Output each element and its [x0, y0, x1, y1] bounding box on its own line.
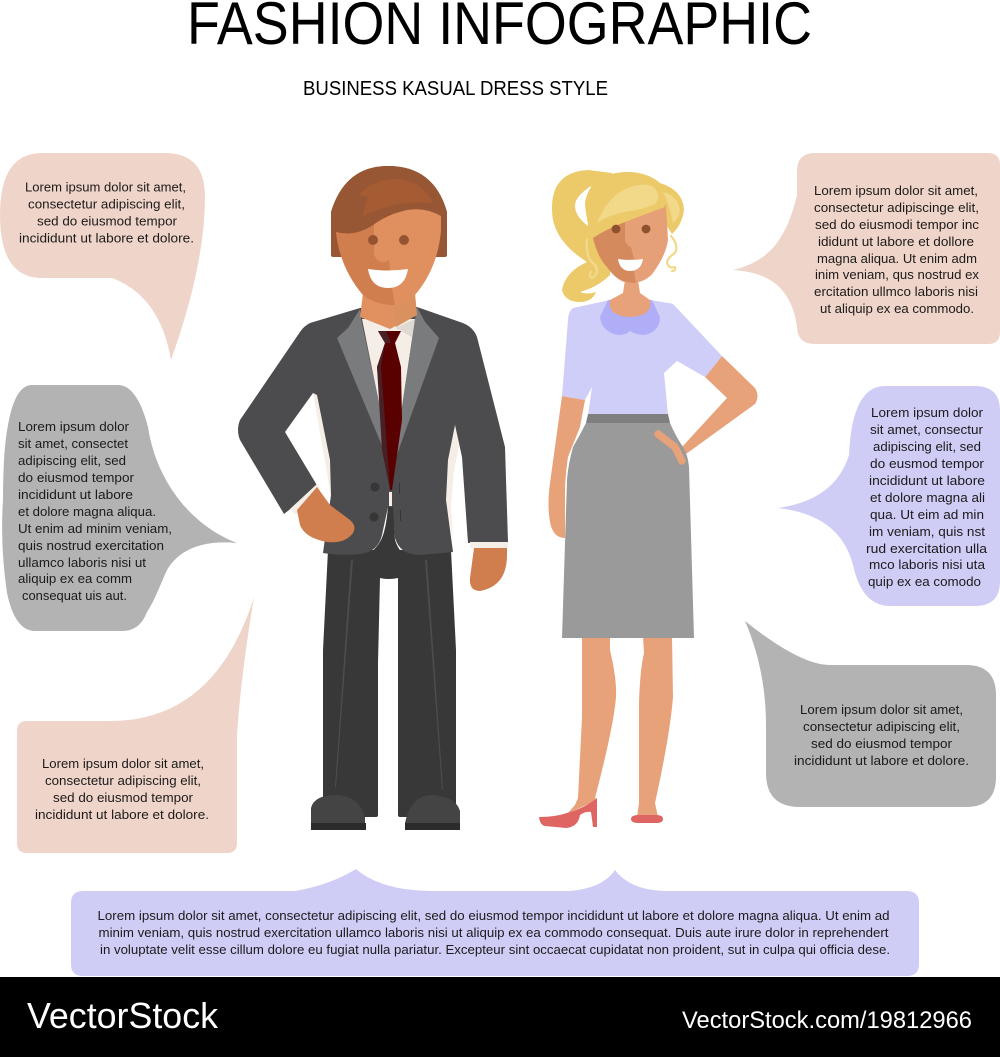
callout: bottom left: Lorem ipsum dolor sit amet,: [42, 756, 204, 771]
eyes: [368, 235, 409, 245]
callout: top right: consectetur adipiscinge elit,: [814, 200, 979, 215]
face shade: [593, 205, 636, 283]
callout: bottom left: [17, 597, 254, 853]
callout: top right: ut aliquip ex ea commodo.: [820, 301, 974, 316]
callout: middle left: Lorem ipsum dolor: [18, 419, 130, 434]
subtitle: BUSINESS KASUAL DRESS STYLE: [303, 78, 608, 100]
callout: top right: sed do eiusmodi tempor inc: [815, 217, 980, 232]
callout: middle right: rud exercitation ulla: [866, 541, 988, 556]
callout: top right: ercitation ullmco laboris nisi: [814, 284, 978, 299]
left cuff: [290, 484, 321, 515]
hand on hip: [658, 434, 682, 461]
figure: businessman: [238, 166, 508, 830]
callout: top left: consectetur adipiscing elit,: [28, 196, 185, 212]
callout: bottom right: incididunt ut labore et dolore.: [794, 753, 969, 768]
callout: top right: ididunt ut labore et dollore: [818, 234, 974, 249]
right hand: [470, 548, 507, 591]
right arm: [682, 356, 758, 454]
skirt: [562, 423, 694, 638]
callout: bottom left: consectetur adipiscing elit,: [45, 773, 201, 788]
callout: bottom wide: Lorem ipsum dolor sit amet, consectetur adipiscing elit, sed do eiusmod tempor incididunt ut labore et dolore magna aliqua. Ut enim ad: [98, 908, 890, 923]
smile: [618, 259, 643, 271]
footer bar: [0, 977, 1000, 1057]
hair highlight: [597, 185, 658, 223]
callout: bottom right: sed do eiusmod tempor: [811, 736, 953, 751]
left hand: [297, 487, 354, 542]
callout: middle right: sit amet, consectur: [870, 422, 984, 437]
flat shoe: [631, 815, 663, 823]
callout: top left: Lorem ipsum dolor sit amet,: [25, 180, 186, 194]
head hair back: [585, 172, 684, 240]
ponytail: [552, 170, 612, 302]
shirt sliver right: [445, 425, 459, 540]
callout: middle right: Lorem ipsum dolor: [871, 405, 984, 420]
right cuff: [470, 542, 508, 548]
callout: bottom wide: minim veniam, quis nostrud exercitation ullamco laboris nisi ut aliquip ex ea commodo consequat. Duis aute irure dolor in reprehendert: [98, 925, 889, 940]
shirt front: [362, 319, 415, 453]
face shade: [336, 200, 395, 305]
callout: bottom wide: [71, 869, 919, 976]
callout: top right: magna aliqua. Ut enim adm: [817, 251, 977, 266]
face: [336, 200, 441, 305]
blouse collar: [600, 300, 660, 335]
waistband: [586, 414, 670, 423]
callout: middle right: quip ex ea comodo: [868, 574, 981, 589]
neck: [360, 293, 417, 329]
hair highlight: [359, 179, 433, 217]
callout: middle left: sit amet, consectet: [18, 436, 128, 451]
callout: bottom right: Lorem ipsum dolor sit amet,: [800, 702, 963, 717]
callout: bottom wide: in voluptate velit esse cillum dolore eu fugiat nulla pariatur. Excepteur sint occaecat cupidatat non proident, sut in culpa qui officia dese.: [100, 942, 890, 957]
trousers: [323, 550, 456, 817]
callout: middle left: [2, 385, 237, 631]
figure: businesswoman: [539, 170, 758, 828]
shirt sliver left: [313, 393, 332, 497]
necktie: [377, 331, 402, 490]
callout: middle right: et dolore magna ali: [870, 490, 985, 505]
left shoe: [311, 795, 366, 830]
blouse: [562, 300, 722, 415]
callout: bottom left: sed do eiusmod tempor: [53, 790, 194, 805]
callout: top left: [0, 153, 205, 360]
eyes: [612, 225, 650, 233]
callout: middle right: qua. Ut eim ad min: [870, 507, 984, 522]
callout: bottom right: [745, 621, 996, 807]
callout: middle right: mco laboris nisi uta: [869, 557, 986, 572]
callout: middle left: aliquip ex ea comm: [18, 571, 132, 586]
callout: top left: incididunt ut labore et dolore.: [19, 230, 194, 246]
hair fringe: [585, 172, 665, 238]
trouser creases: [335, 560, 443, 790]
right leg: [637, 636, 673, 817]
callout: top right: inim veniam, qus nostrud ex: [815, 267, 979, 282]
callout: middle right: do eusmod tempor: [870, 456, 985, 471]
right shoe: [405, 795, 460, 830]
dark inner front: [366, 507, 405, 555]
left arm: [548, 396, 585, 538]
smile: [368, 269, 408, 288]
callout: middle right: [778, 386, 1000, 606]
right curl: [667, 236, 676, 271]
callout: middle right: incididunt ut labore: [869, 473, 985, 488]
callout: top right: Lorem ipsum dolor sit amet,: [814, 183, 978, 198]
footer url: VectorStock.com/19812966: [682, 1007, 972, 1034]
callout: top left: sed do eiusmod tempor: [37, 214, 178, 228]
lapel left: [337, 309, 390, 460]
callout: middle left: ullamco laboris nisi ut: [18, 555, 146, 570]
hair front: [331, 166, 447, 233]
jacket buttons: [369, 482, 401, 522]
lapel right: [392, 307, 439, 460]
left leg: [567, 636, 616, 814]
left curl: [587, 240, 597, 278]
high heel shoe: [539, 798, 597, 828]
jacket: [238, 307, 508, 555]
hair back: [331, 166, 447, 257]
callout: middle right: adipiscing elit, sed: [873, 439, 981, 454]
callout: bottom left: incididunt ut labore et dolore.: [35, 807, 209, 822]
callout: middle left: consequat uis aut.: [22, 588, 127, 603]
neck: [610, 280, 650, 317]
callout: middle left: do eiusmod tempor: [18, 470, 135, 485]
callout: middle left: incididunt ut labore: [18, 487, 133, 502]
collar shade: [395, 319, 415, 338]
callout: middle left: quis nostrud exercitation: [18, 538, 164, 553]
callout: middle right: im veniam, quis nst: [869, 524, 985, 539]
shirt tab: [389, 492, 392, 506]
face: [593, 205, 668, 283]
callout: middle left: et dolore magna aliqua.: [18, 504, 156, 519]
callout: top right: [733, 153, 1000, 344]
side hair highlight: [663, 192, 680, 223]
callout: bottom right: consectetur adipiscing elit,: [803, 719, 960, 734]
callout: middle left: Ut enim ad minim veniam,: [18, 521, 172, 536]
callout: middle left: adipiscing elit, sed: [18, 453, 126, 468]
footer logo: VectorStock: [27, 995, 219, 1036]
